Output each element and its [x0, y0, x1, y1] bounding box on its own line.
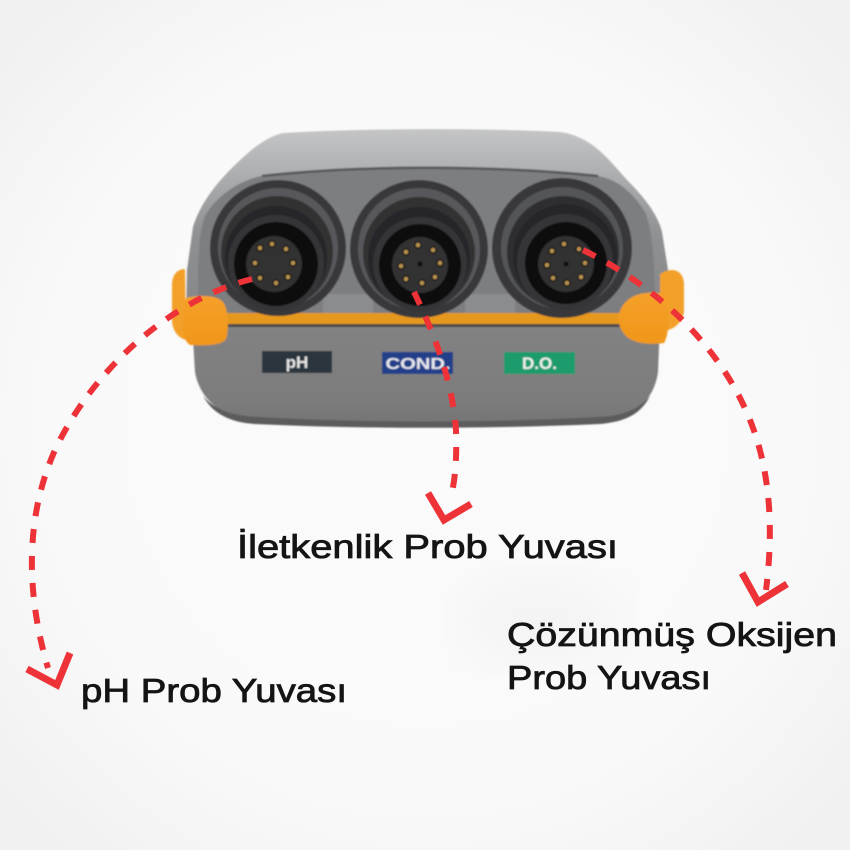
- pins: [398, 242, 443, 286]
- caption: dissolved oxygen probe socket: Çözünmüş Oksijen: [507, 616, 837, 653]
- arrow: pH dashed: [27, 279, 252, 685]
- arrow: conductivity dashed: [414, 292, 471, 520]
- arrow: dissolved oxygen dashed: [583, 250, 787, 602]
- label: pH: [262, 351, 332, 373]
- upper face panel: [198, 168, 655, 314]
- label: D.O.: D.O.: [522, 354, 557, 373]
- label: COND.: [382, 352, 453, 374]
- caption: conductivity probe socket: İletkenlik Prob Yuvası: [237, 528, 618, 565]
- label: D.O.: [504, 352, 575, 374]
- connector: D.O.: [492, 178, 632, 318]
- arrowhead: pH: [27, 653, 70, 685]
- label: COND.: COND.: [386, 356, 450, 373]
- caption: dissolved oxygen probe socket: [507, 616, 837, 696]
- pins: [544, 241, 588, 286]
- connector: pH: [210, 180, 346, 316]
- label: pH: pH: [286, 353, 308, 372]
- caption: pH probe socket: pH Prob Yuvası: [81, 672, 347, 709]
- device lower body: [192, 322, 660, 426]
- connector: COND: [350, 180, 488, 318]
- right orange clip: [619, 270, 684, 344]
- bottom dark edge: [203, 396, 650, 428]
- pins: [252, 241, 296, 286]
- left orange clip: [172, 269, 228, 345]
- device: water quality meter: [172, 129, 684, 428]
- arrowhead: conductivity: [428, 493, 471, 520]
- connector tabs: [323, 294, 515, 314]
- arrowhead: dissolved oxygen: [742, 573, 787, 602]
- orange band: [205, 313, 645, 324]
- device body top shell: [186, 129, 668, 322]
- caption: dissolved oxygen probe socket: Prob Yuvası: [507, 659, 711, 696]
